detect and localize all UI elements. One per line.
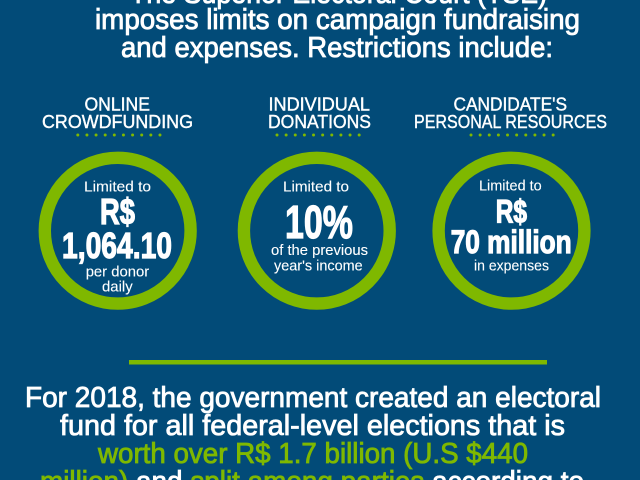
heading: individual donations: DONATIONS [268, 112, 371, 132]
limit text: R$ [100, 191, 135, 232]
limit text: 1,064.10 [62, 225, 172, 266]
limit text: daily [102, 279, 133, 296]
limit text [271, 179, 368, 275]
heading: online crowdfunding: CROWDFUNDING [42, 112, 193, 132]
panel: individual donations [244, 94, 390, 304]
heading: individual donations [268, 94, 371, 132]
limit text: per donor [86, 264, 149, 281]
limit text: of the previous [271, 242, 368, 259]
limit text: Limited to [479, 178, 542, 195]
limit text: Limited to [283, 179, 349, 196]
green ring [45, 158, 191, 304]
dotted divider [277, 134, 359, 136]
limit text: Limited to [84, 179, 151, 196]
heading: candidate's personal resources: CANDIDATE'S [454, 94, 567, 114]
panel: online crowdfunding [42, 94, 193, 304]
green ring [244, 158, 390, 304]
heading: candidate's personal resources: PERSONAL RESOURCES [414, 112, 607, 132]
limit text: R$ [496, 194, 527, 230]
heading: restrictions intro: and expenses. Restrictions include: [121, 32, 553, 64]
green ring [439, 158, 584, 304]
limit text [451, 178, 572, 275]
text block: electoral fund: fund for all federal-level elections that is [60, 410, 565, 442]
section divider [129, 360, 547, 364]
panel: candidate's personal resources [414, 94, 607, 304]
dotted divider [78, 134, 160, 136]
heading: online crowdfunding [42, 94, 193, 132]
limit text: year's income [274, 258, 363, 275]
heading: online crowdfunding: ONLINE [84, 94, 150, 114]
heading: restrictions intro [95, 0, 580, 64]
limit text: in expenses [474, 258, 549, 275]
limit text [62, 179, 172, 296]
heading: individual donations: INDIVIDUAL [268, 94, 370, 114]
heading: candidate's personal resources [414, 94, 607, 132]
text block: electoral fund: worth over R$ 1.7 billion (U.S $440 [97, 438, 528, 470]
text block: electoral fund [25, 382, 601, 480]
dotted divider [471, 134, 553, 136]
limit text: 10% [285, 196, 353, 248]
limit text: 70 million [451, 224, 572, 260]
text block: electoral fund: For 2018, the government created an electoral [25, 382, 601, 414]
heading: restrictions intro: imposes limits on campaign fundraising [95, 4, 580, 36]
